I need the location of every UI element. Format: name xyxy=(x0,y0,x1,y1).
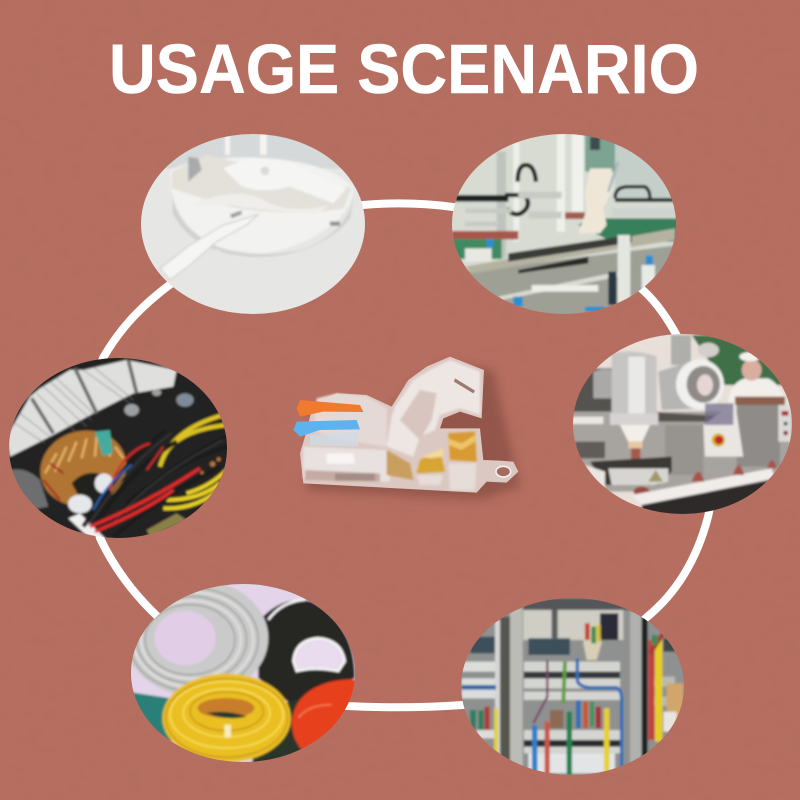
photo: factory automation line xyxy=(452,134,676,314)
orange lever xyxy=(297,400,363,417)
connector shadow xyxy=(307,363,520,500)
blue lever xyxy=(293,420,360,437)
product: transparent wire connector xyxy=(293,357,520,500)
title: USAGE SCENARIO xyxy=(109,30,699,108)
connector body xyxy=(300,357,518,493)
photo: circuit board with wires xyxy=(9,358,227,538)
photo: electrical cabinet xyxy=(461,598,684,775)
connecting ring xyxy=(87,203,712,707)
photo: food processing machine xyxy=(573,334,792,514)
photo: wire coils xyxy=(131,584,355,762)
photo: round ceiling light xyxy=(141,134,365,314)
